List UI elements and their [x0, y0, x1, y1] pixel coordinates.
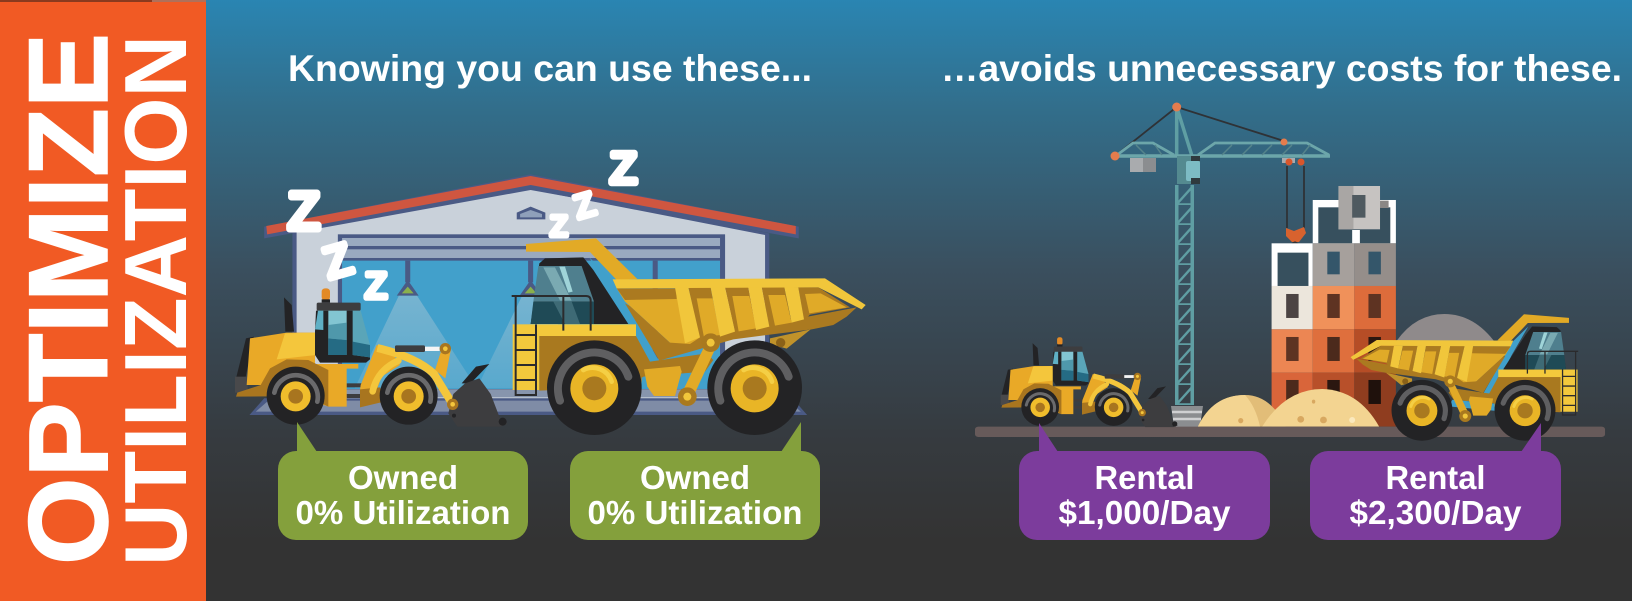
- callout: owned truck: Owned: [640, 459, 750, 496]
- icon: wheel loader: [235, 288, 507, 427]
- callout: rental loader: [1019, 423, 1270, 540]
- icon: sleeping Z letters: [288, 144, 637, 306]
- icon: small wheel loader: [1001, 337, 1178, 427]
- icon: gray gravel pile: [1395, 314, 1496, 343]
- icon: building under construction: [1272, 186, 1396, 427]
- icon: sleeping Z letters: Z: [610, 144, 637, 193]
- callout: owned loader: 0% Utilization: [296, 494, 510, 531]
- callout: rental truck: Rental: [1386, 459, 1486, 496]
- heading: right: …avoids unnecessary costs for these.: [941, 48, 1622, 89]
- illustration: garage building: [249, 174, 807, 415]
- icon: sleeping Z letters: Z: [288, 183, 320, 241]
- icon: tower crane: [1110, 102, 1330, 427]
- icon: dump truck: [512, 238, 866, 435]
- callout: owned truck: [570, 422, 820, 540]
- heading: left: Knowing you can use these...: [288, 48, 812, 89]
- title: UTILIZATION: UTILIZATION: [106, 35, 205, 566]
- callout: owned loader: Owned: [348, 459, 458, 496]
- callout: rental truck: [1310, 423, 1561, 540]
- icon: sleeping Z letters: Z: [550, 211, 568, 243]
- panel: orange title sidebar: [0, 0, 206, 601]
- callout: rental loader: Rental: [1094, 459, 1194, 496]
- callout: rental loader: $1,000/Day: [1058, 494, 1231, 531]
- icon: small dump truck: [1351, 314, 1578, 441]
- callout: rental truck: $2,300/Day: [1350, 494, 1522, 531]
- ground strip: [975, 427, 1605, 437]
- title: OPTIMIZE: OPTIMIZE: [6, 33, 131, 565]
- icon: sleeping Z letters: Z: [365, 265, 387, 306]
- callout: owned truck: 0% Utilization: [588, 494, 802, 531]
- icon: sand piles: [1198, 389, 1379, 427]
- callout: owned loader: [278, 422, 528, 540]
- icon: sleeping Z letters: Z: [570, 185, 599, 226]
- icon: sleeping Z letters: Z: [318, 234, 358, 289]
- illustration: construction site: [975, 102, 1605, 437]
